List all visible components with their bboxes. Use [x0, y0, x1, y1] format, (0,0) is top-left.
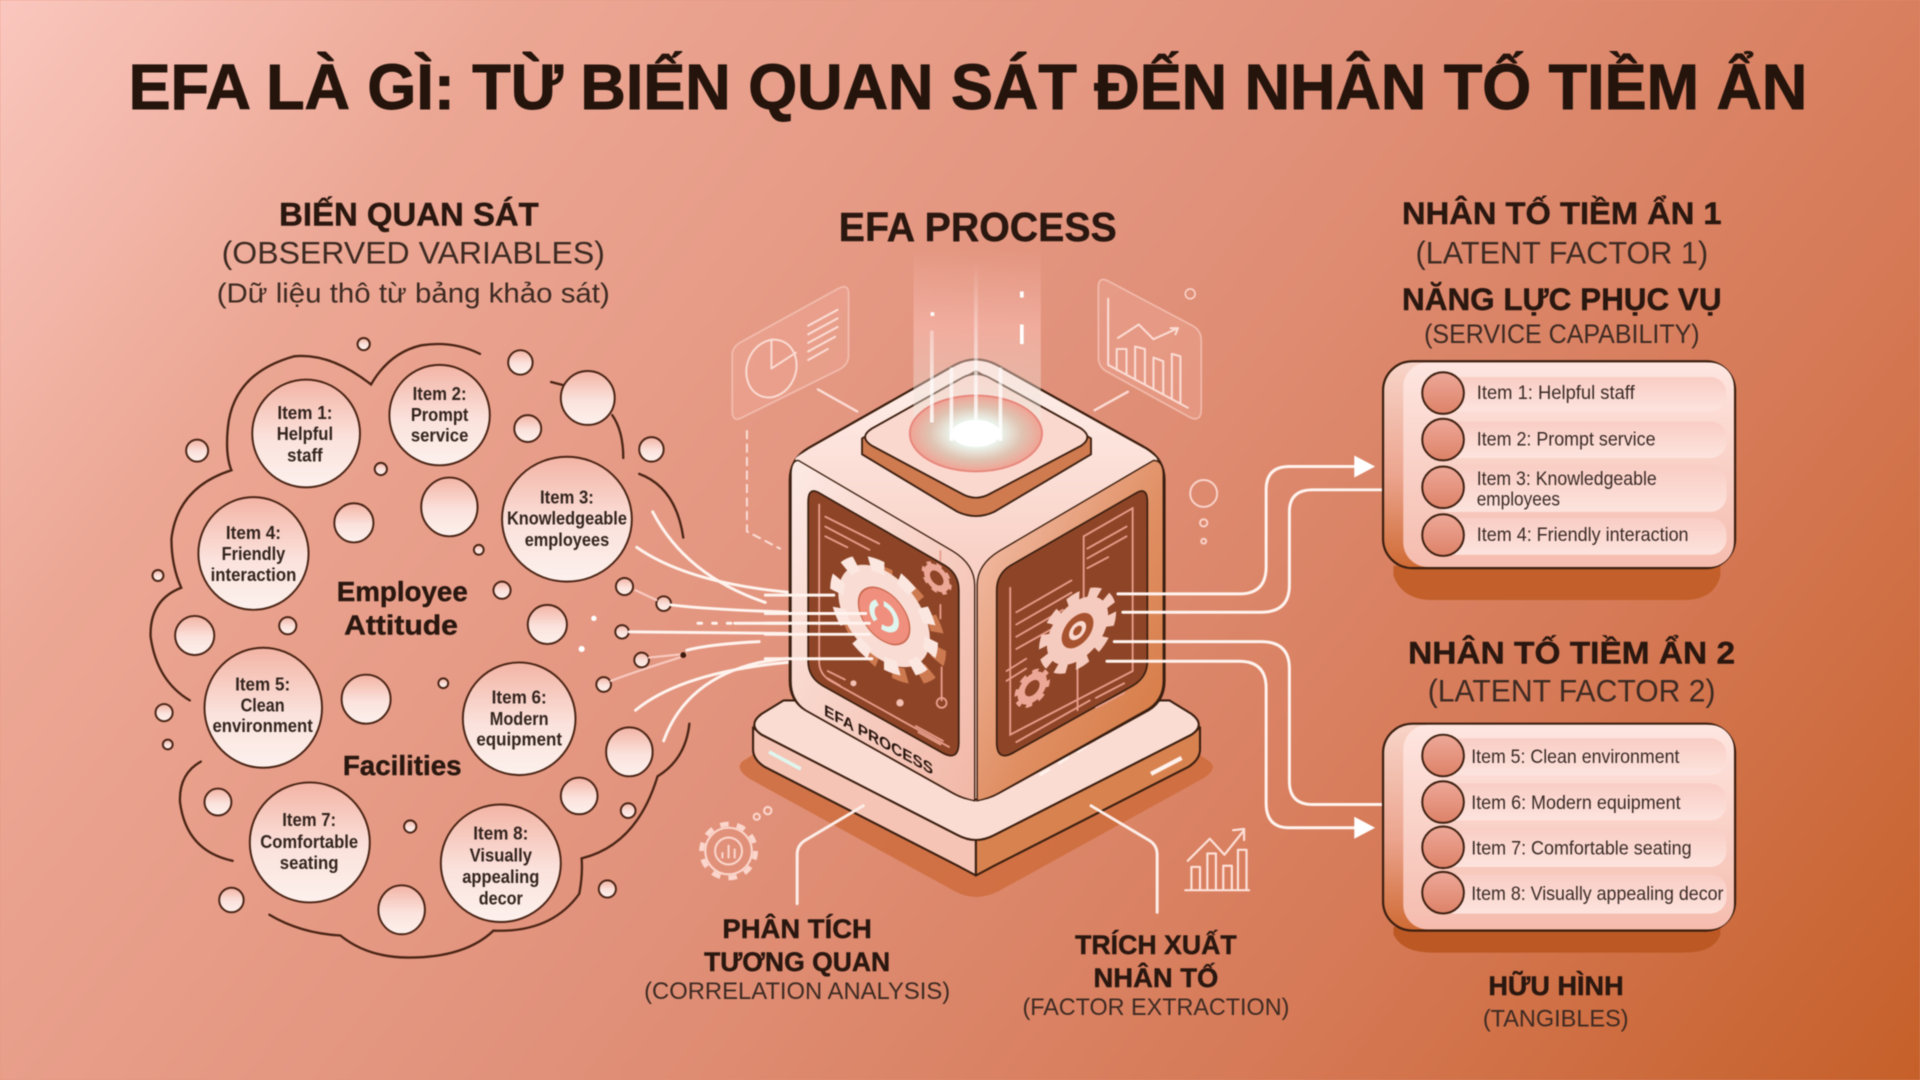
- base shadow: [740, 722, 1213, 897]
- panel back: [1383, 361, 1735, 568]
- connector: factor extraction: [1091, 806, 1157, 912]
- group label: employee attitude: [337, 576, 468, 640]
- connector: correlation analysis: [797, 806, 863, 904]
- group label: facilities: Facilities: [343, 750, 462, 781]
- label: tangibles: HỮU HÌNH: [1488, 970, 1624, 1001]
- item bubble 6: equipment: [476, 729, 562, 750]
- row 8: [1422, 872, 1727, 913]
- heading: latent factor 2: (LATENT FACTOR 2): [1428, 673, 1716, 709]
- heading: latent factor 1: NHÂN TỐ TIỀM ẨN 1: [1402, 195, 1722, 231]
- label: factor extraction: (FACTOR EXTRACTION): [1022, 994, 1289, 1021]
- item bubble 2: Prompt: [411, 404, 468, 425]
- cube body: [790, 359, 1164, 800]
- item bubble 7: [250, 782, 370, 902]
- heading: latent factor 1: NĂNG LỰC PHỤC VỤ: [1402, 281, 1722, 317]
- item bubble 5: Clean: [241, 694, 285, 715]
- row 6: [1422, 781, 1727, 823]
- right screen: [997, 491, 1147, 756]
- label: factor extraction: NHÂN TỐ: [1093, 961, 1218, 993]
- icon: pie chart card: [732, 287, 857, 549]
- heading: observed variables: (Dữ liệu thô từ bảng khảo sát): [217, 277, 610, 308]
- icon: line chart card: [1095, 279, 1201, 419]
- item bubble 8: Visually: [470, 844, 533, 865]
- icon: growth bars: [1185, 829, 1249, 890]
- row 2: [1422, 419, 1727, 460]
- row 1: [1422, 372, 1727, 414]
- label: correlation analysis: PHÂN TÍCH: [722, 913, 872, 944]
- small floating bubbles: [1190, 480, 1217, 544]
- heading: observed variables: BIẾN QUAN SÁT: [279, 195, 539, 232]
- item bubble 6: [463, 662, 576, 775]
- label on cube: EFA PROCESS: [824, 701, 933, 779]
- item bubble 2: Item 2:: [413, 383, 467, 404]
- icon: gear with chart: [702, 807, 771, 878]
- panel shadow: [1393, 927, 1720, 953]
- item bubble 4: Item 4:: [226, 522, 281, 543]
- row 7: Item 7: Comfortable seating: [1471, 839, 1692, 860]
- left screen: [808, 491, 959, 756]
- row 1: Item 1: Helpful staff: [1477, 383, 1635, 404]
- item bubble 8: decor: [479, 887, 523, 908]
- panel: observed variables cloud: [151, 338, 689, 958]
- label: correlation analysis: (CORRELATION ANALYSIS): [644, 978, 950, 1005]
- cube top face: [795, 361, 1157, 558]
- glow disc: [910, 263, 1042, 471]
- row 4: [1422, 514, 1727, 556]
- heading: latent factor 2: [1408, 635, 1735, 709]
- item bubble 4: interaction: [211, 564, 296, 585]
- gear: left large: [837, 545, 939, 695]
- panel shadow: [1393, 566, 1720, 600]
- item bubble 5: [204, 648, 322, 768]
- item bubble 4: [198, 497, 309, 610]
- top plate: [862, 371, 1091, 516]
- row 3: [1422, 465, 1727, 512]
- heading: latent factor 1: (SERVICE CAPABILITY): [1424, 319, 1700, 349]
- row 6: Item 6: Modern equipment: [1471, 793, 1681, 814]
- flow arrows to latent factors: [1107, 456, 1382, 839]
- item bubble 3: Knowledgeable: [507, 508, 627, 529]
- item bubble 1: [252, 380, 360, 487]
- label: tangibles: (TANGIBLES): [1483, 1006, 1629, 1033]
- label: correlation analysis: TƯƠNG QUAN: [704, 947, 890, 977]
- flow lines over cube: [765, 595, 872, 659]
- row 5: [1422, 735, 1727, 776]
- item bubble 3: [502, 457, 632, 582]
- panel: latent factor 2 items: [1383, 724, 1735, 953]
- gear: right small: [1017, 665, 1048, 711]
- item bubble 2: service: [411, 424, 468, 445]
- cube: EFA process machine: [740, 250, 1213, 897]
- panel: latent factor 1 items: [1383, 361, 1735, 600]
- label: tangibles: [1483, 970, 1629, 1033]
- group label: employee attitude: Attitude: [344, 609, 458, 640]
- item bubble 7: seating: [280, 852, 339, 873]
- row 3: employees: [1477, 490, 1560, 511]
- title: EFA LÀ GÌ: TỪ BIẾN QUAN SÁT ĐẾN NHÂN TỐ TIỀM ẨN: [129, 52, 1807, 123]
- cube right face: [977, 460, 1163, 801]
- group label: employee attitude: Employee: [337, 576, 468, 607]
- row 3: Item 3: Knowledgeable: [1477, 469, 1657, 490]
- item bubble 5: Item 5:: [235, 674, 290, 695]
- row 8: Item 8: Visually appealing decor: [1471, 884, 1723, 905]
- item bubble 6: Modern: [490, 708, 549, 729]
- gear: left small: [924, 559, 950, 597]
- heading: observed variables: (OBSERVED VARIABLES): [222, 234, 605, 270]
- heading: EFA process: EFA PROCESS: [839, 204, 1117, 250]
- item bubble 8: [441, 804, 561, 922]
- panel front: [1403, 725, 1734, 929]
- light beam: [913, 250, 1041, 421]
- row 4: Item 4: Friendly interaction: [1477, 525, 1689, 546]
- base plate: [753, 700, 1200, 876]
- flow lines into cube: [579, 512, 872, 741]
- item bubble 4: Friendly: [222, 543, 286, 564]
- row 7: [1422, 827, 1727, 868]
- small bubbles: [152, 338, 671, 934]
- item bubble 1: staff: [287, 445, 323, 466]
- cube left face: [791, 460, 975, 801]
- item bubble 7: Item 7:: [282, 809, 336, 830]
- row 5: Item 5: Clean environment: [1471, 747, 1680, 768]
- panel back: [1383, 724, 1735, 931]
- label: factor extraction: TRÍCH XUẤT: [1075, 929, 1237, 960]
- item bubble 1: Helpful: [277, 423, 333, 444]
- item bubble 3: employees: [525, 529, 609, 550]
- heading: latent factor 1: [1402, 195, 1722, 349]
- item bubble 6: Item 6:: [492, 686, 547, 707]
- item bubble 2: [389, 365, 490, 465]
- heading: observed variables: [217, 195, 610, 308]
- panel front: [1403, 362, 1734, 567]
- item bubble 8: Item 8:: [473, 822, 528, 843]
- row 2: Item 2: Prompt service: [1477, 430, 1656, 451]
- label: correlation analysis: [644, 913, 950, 1005]
- cloud outline: [151, 344, 689, 958]
- item bubble 1: Item 1:: [277, 402, 332, 423]
- item bubble 7: Comfortable: [260, 831, 358, 852]
- heading: latent factor 2: NHÂN TỐ TIỀM ẨN 2: [1408, 635, 1735, 671]
- item bubble 3: Item 3:: [540, 486, 594, 507]
- item bubble 8: appealing: [462, 866, 539, 887]
- heading: latent factor 1: (LATENT FACTOR 1): [1416, 234, 1708, 270]
- gear: right large: [1044, 581, 1111, 680]
- item bubble 5: environment: [212, 715, 313, 736]
- label: factor extraction: [1022, 929, 1289, 1021]
